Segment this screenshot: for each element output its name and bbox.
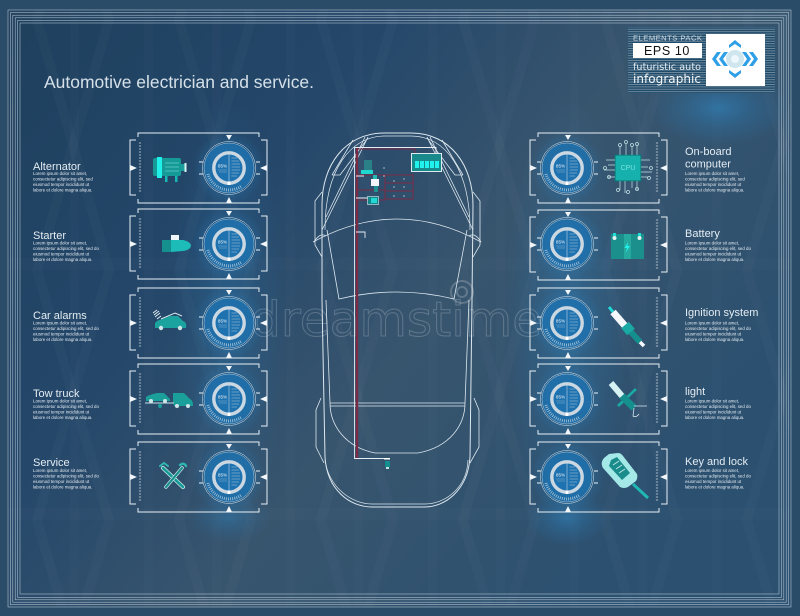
- gauge: [531, 363, 603, 435]
- EPS label: [633, 43, 702, 58]
- frame: [530, 442, 667, 512]
- panel: starter: [33, 208, 267, 280]
- description: consectetur adipiscing elit, sed do: [685, 474, 751, 478]
- description: consectetur adipiscing elit, sed do: [33, 326, 99, 331]
- gauge: [193, 287, 265, 359]
- icon: car battery: [611, 233, 644, 259]
- badge text line one: futuristic auto: [633, 62, 701, 73]
- description: labore et dolore magna aliqua.: [685, 188, 744, 192]
- side mirrors: [314, 192, 481, 257]
- icon: starter motor: [162, 235, 191, 252]
- icon: bulb: [611, 383, 647, 417]
- watermark: dreamstime: [250, 292, 542, 348]
- label: Service: [33, 457, 70, 469]
- starter component: [361, 160, 373, 174]
- frame: [130, 442, 267, 512]
- description: eiusmod tempor incididunt ut: [33, 479, 90, 484]
- description: eiusmod tempor incididunt ut: [685, 252, 742, 256]
- badge heading: ELEMENTS PACK: [633, 34, 702, 42]
- label: Battery: [685, 228, 720, 240]
- description: labore et dolore magna aliqua.: [685, 484, 744, 490]
- description: consectetur adipiscing elit, sed do: [685, 326, 751, 331]
- car outline: [313, 133, 481, 507]
- EPS label: EPS 10: [644, 44, 690, 58]
- label: Tow truck: [33, 388, 80, 400]
- battery module: [412, 154, 442, 172]
- white wires: [354, 147, 436, 458]
- panel: key and lock: [530, 441, 751, 513]
- fuse block: [368, 196, 378, 204]
- car body: [322, 133, 473, 507]
- description: consectetur adipiscing elit, sed do: [685, 246, 751, 251]
- icon: alternator: [153, 157, 186, 182]
- frame: [530, 133, 667, 203]
- description: labore et dolore magna aliqua.: [33, 337, 92, 342]
- label: computer: [685, 158, 731, 170]
- description: Lorem ipsum dolor sit amet,: [685, 240, 739, 246]
- logo badge: [628, 27, 775, 93]
- windshield: [313, 219, 481, 299]
- gauge: [531, 132, 603, 204]
- label: Starter: [33, 230, 66, 242]
- wiring diagram: [354, 147, 442, 469]
- rear lamp: [384, 458, 390, 469]
- relay component: [371, 175, 379, 192]
- gauge: [531, 287, 603, 359]
- description: eiusmod tempor incididunt ut: [33, 182, 90, 187]
- panel: alternator: [33, 132, 267, 204]
- description: Lorem ipsum dolor sit amet,: [33, 171, 87, 176]
- description: eiusmod tempor incididunt ut: [685, 410, 742, 414]
- gauge: [531, 441, 603, 513]
- rear window: [326, 300, 469, 453]
- description: labore et dolore magna aliqua.: [33, 484, 92, 490]
- rear fenders: [316, 398, 479, 463]
- description: Lorem ipsum dolor sit amet,: [33, 468, 87, 473]
- icon: CPU chip: CPU: [621, 165, 635, 172]
- description: Lorem ipsum dolor sit amet,: [33, 240, 87, 246]
- gauge: [531, 208, 603, 280]
- icon: spark plug: [609, 307, 644, 346]
- red wires: [356, 148, 358, 458]
- frame: [530, 364, 667, 434]
- panel: service: [33, 441, 267, 513]
- description: Lorem ipsum dolor sit amet,: [33, 320, 87, 326]
- frame: [530, 288, 667, 358]
- description: consectetur adipiscing elit, sed: [685, 176, 745, 182]
- frame: [130, 209, 267, 279]
- description: eiusmod tempor incididunt ut: [33, 252, 90, 256]
- description: labore et dolore magna aliqua.: [685, 257, 744, 262]
- icon: crossed tools: [160, 463, 186, 487]
- frame: [130, 133, 267, 203]
- frame: [130, 288, 267, 358]
- description: Lorem ipsum dolor sit amet,: [685, 468, 739, 473]
- icon: key fob: [602, 453, 648, 498]
- icon: tow truck: [145, 393, 193, 408]
- description: consectetur adipiscing elit, sed: [33, 176, 93, 182]
- description: labore et dolore magna aliqua.: [685, 415, 744, 420]
- panel: light: [530, 363, 751, 435]
- gauge: [193, 363, 265, 435]
- description: consectetur adipiscing elit, sed do: [33, 474, 99, 478]
- title: Automotive electrician and service.: [44, 72, 314, 92]
- description: consectetur adipiscing elit, sed do: [33, 246, 99, 251]
- description: Lorem ipsum dolor sit amet,: [685, 171, 739, 176]
- frame: [530, 210, 667, 280]
- description: labore et dolore magna aliqua.: [33, 257, 92, 262]
- label: On-board: [685, 146, 731, 158]
- description: Lorem ipsum dolor sit amet,: [33, 398, 87, 404]
- gauge: [193, 132, 265, 204]
- description: consectetur adipiscing elit, sed do: [33, 404, 99, 409]
- pillars: [322, 137, 473, 230]
- panel: ignition system: [530, 287, 758, 359]
- badge icon: [706, 34, 765, 86]
- badge text line two: infographic: [633, 72, 701, 86]
- panel: car alarms: [33, 287, 267, 359]
- panel: on-board computer: [530, 132, 745, 204]
- icon: CPU chip: [604, 140, 652, 194]
- gauge: [193, 441, 265, 513]
- label: Key and lock: [685, 456, 748, 468]
- label: light: [685, 386, 705, 398]
- description: Lorem ipsum dolor sit amet,: [685, 320, 739, 326]
- label: Ignition system: [685, 307, 758, 319]
- panel: tow truck: [33, 363, 267, 435]
- description: labore et dolore magna aliqua.: [685, 337, 744, 342]
- description: consectetur adipiscing elit, sed do: [685, 404, 751, 409]
- description: eiusmod tempor incididunt ut: [33, 410, 90, 414]
- gauge: [193, 208, 265, 280]
- label: Car alarms: [33, 310, 87, 322]
- description: eiusmod tempor incididunt ut: [685, 479, 742, 484]
- description: Lorem ipsum dolor sit amet,: [685, 398, 739, 404]
- icon: car alarm: [153, 310, 186, 330]
- frame: [130, 364, 267, 434]
- description: eiusmod tempor incididunt ut: [685, 332, 742, 336]
- description: eiusmod tempor incididunt ut: [33, 332, 90, 336]
- description: labore et dolore magna aliqua.: [33, 188, 92, 192]
- description: eiusmod tempor incididunt ut: [685, 182, 742, 187]
- description: labore et dolore magna aliqua.: [33, 415, 92, 420]
- label: Alternator: [33, 161, 81, 173]
- panel: battery: [530, 208, 751, 280]
